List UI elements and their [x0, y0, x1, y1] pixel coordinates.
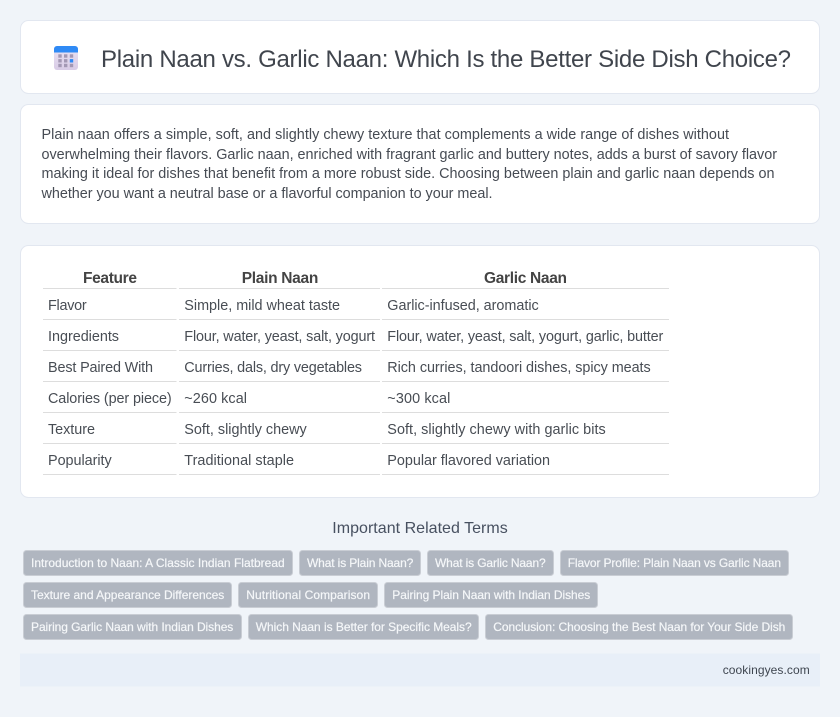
table row: popularity: Traditional staple: [184, 453, 294, 469]
tag: [560, 550, 788, 576]
tag: [300, 550, 420, 576]
table row: popularity: [48, 453, 550, 469]
table row: popularity: Popular flavored variation: [387, 453, 550, 469]
tag: Introduction to Naan: A Classic Indian Flatbread: [31, 556, 285, 570]
table row: flavor: Flavor: [48, 298, 87, 314]
table row: best paired with: Curries, dals, dry vegetables: [184, 360, 362, 376]
tag: What is Plain Naan?: [307, 556, 414, 570]
heading: related terms: Important Related Terms: [332, 520, 508, 537]
table row: ingredients: [48, 329, 664, 345]
tag: [24, 550, 292, 576]
tag: [24, 582, 232, 608]
intro text: [40, 127, 777, 202]
intro text: whether you want a neutral base or a flavorful companion to your meal.: [40, 186, 492, 202]
table row: flavor: [48, 298, 539, 314]
tag: [486, 614, 792, 640]
icon: calendar: [54, 46, 78, 70]
table header row: Feature: [83, 270, 137, 287]
tag: [248, 614, 478, 640]
intro text: Plain naan offers a simple, soft, and slightly chewy texture that complements a wide range of dishes without: [42, 127, 729, 143]
table row: calories: ~300 kcal: [387, 391, 450, 407]
table row: ingredients: Flour, water, yeast, salt, yogurt, garlic, butter: [387, 329, 664, 345]
table row: texture: [48, 422, 606, 438]
tag: [384, 582, 598, 608]
table row: ingredients: Ingredients: [48, 329, 119, 345]
table header row: Garlic Naan: [484, 270, 567, 287]
table row: calories: [48, 391, 450, 407]
panel: title header: [20, 20, 820, 94]
footer source: cookingyes.com: [723, 663, 810, 677]
tag: Conclusion: Choosing the Best Naan for Your Side Dish: [493, 620, 785, 634]
footer: [20, 654, 820, 686]
table row: calories: Calories (per piece): [48, 391, 172, 407]
table header row: Plain Naan: [242, 270, 318, 287]
table row: best paired with: Rich curries, tandoori dishes, spicy meats: [387, 360, 651, 376]
table row: popularity: Popularity: [48, 453, 112, 469]
tag: [238, 582, 378, 608]
panel: related term tags: [24, 550, 792, 640]
table row: calories: ~260 kcal: [184, 391, 247, 407]
tag: Texture and Appearance Differences: [31, 588, 224, 602]
tag: Pairing Garlic Naan with Indian Dishes: [31, 620, 233, 634]
panel: introduction: [20, 104, 820, 224]
table header row: [83, 270, 567, 287]
tag: What is Garlic Naan?: [435, 556, 546, 570]
tag: Which Naan is Better for Specific Meals?: [256, 620, 472, 634]
table row: flavor: Simple, mild wheat taste: [184, 298, 340, 314]
table row: best paired with: Best Paired With: [48, 360, 153, 376]
table row: texture: Texture: [48, 422, 95, 438]
table row: ingredients: Flour, water, yeast, salt, yogurt: [184, 329, 375, 345]
title: Plain Naan vs. Garlic Naan: Which Is the Better Side Dish Choice?: [101, 46, 791, 73]
tag: Pairing Plain Naan with Indian Dishes: [392, 588, 590, 602]
panel: comparison table: [20, 246, 820, 498]
table row: texture: Soft, slightly chewy: [184, 422, 307, 438]
tag: [24, 614, 242, 640]
tag: [428, 550, 554, 576]
tag: Flavor Profile: Plain Naan vs Garlic Naan: [568, 556, 781, 570]
table row: flavor: Garlic-infused, aromatic: [387, 298, 539, 314]
intro text: overwhelming their flavors. Garlic naan, enriched with fragrant garlic and buttery notes, adds a burst of savory flavor: [42, 147, 777, 163]
table row: texture: Soft, slightly chewy with garlic bits: [387, 422, 606, 438]
intro text: making it ideal for dishes that benefit from a more robust side. Choosing between plain and garlic naan depends on: [42, 166, 774, 182]
tag: Nutritional Comparison: [246, 588, 370, 602]
table row: best paired with: [48, 360, 651, 376]
